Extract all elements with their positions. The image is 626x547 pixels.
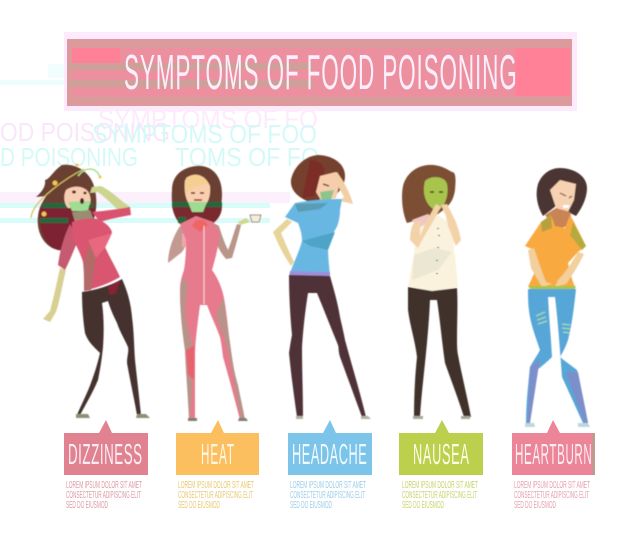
panel: headache: LOREM IPSUM DOLOR SIT AMET: [290, 480, 366, 491]
neck: [72, 210, 94, 226]
compression artefact ghost text: SYMPTOMS OF FOO: [92, 119, 317, 149]
compression artefact ghost text: D POISONING: [0, 142, 138, 172]
shoes: [525, 423, 535, 427]
compression artefact strips: [0, 192, 290, 223]
panel: dizziness: CONSECTETUR ADIPISCING ELIT: [66, 490, 141, 501]
jeans: [526, 289, 588, 423]
left arm: [273, 219, 294, 266]
description: SED DO EIUSMOD: [514, 500, 556, 511]
neck: [308, 203, 328, 210]
arms covering mouth: [410, 204, 441, 248]
panel: nausea: LOREM IPSUM DOLOR SIT AMET: [402, 480, 478, 491]
label box: [64, 420, 148, 475]
title text: SYMPTOMS OF FOOD POISONING: [124, 45, 517, 101]
label box: [288, 420, 372, 475]
face: [316, 172, 340, 202]
hair: [537, 168, 587, 216]
hair: [172, 166, 222, 224]
figure: heartburn woman: [525, 168, 590, 427]
description: SED DO EIUSMOD: [290, 500, 332, 511]
compression artefact ghost text: TOMS OF FO: [175, 142, 319, 172]
jeans rips: [536, 312, 570, 333]
panel: heartburn: [512, 420, 595, 511]
description: SED DO EIUSMOD: [402, 500, 444, 511]
compression artefact ghost text: OD POISONING: [0, 117, 170, 147]
face: [185, 177, 210, 210]
waistband: [528, 286, 576, 291]
panel: headache: CONSECTETUR ADIPISCING ELIT: [290, 490, 365, 501]
description: [178, 480, 254, 511]
panel: dizziness: [64, 420, 148, 511]
hair: [402, 165, 456, 223]
left arm: [168, 226, 192, 263]
figure: nausea woman: [402, 165, 471, 419]
title banner: [64, 32, 577, 111]
shoes: [296, 416, 303, 419]
label: HEAT: [201, 438, 234, 471]
arms on stomach: [528, 248, 552, 287]
trousers: [408, 287, 471, 417]
raised arm: [90, 186, 130, 214]
label: HEARTBURN: [515, 438, 592, 471]
panel: headache: [288, 420, 372, 511]
panel: nausea: [399, 420, 483, 511]
label: DIZZINESS: [68, 438, 142, 470]
description: SED DO EIUSMOD: [66, 500, 108, 511]
label box: [512, 420, 595, 475]
panel: dizziness: LOREM IPSUM DOLOR SIT AMET: [66, 480, 142, 491]
description: [290, 480, 366, 511]
trousers: [77, 279, 141, 415]
description: [402, 480, 478, 511]
collar: [412, 214, 434, 228]
neck: [545, 208, 573, 230]
description: [66, 480, 142, 511]
description: [514, 480, 590, 511]
lowered arm: [43, 268, 66, 322]
panel: heat: LOREM IPSUM DOLOR SIT AMET: [178, 480, 254, 491]
compression artefact ghost text: SYMPTOMS OF FO: [98, 104, 318, 134]
shirt: [72, 218, 120, 291]
buttons: [437, 228, 439, 274]
label box: [399, 420, 483, 475]
label: HEADACHE: [292, 438, 367, 470]
shirt: [525, 215, 586, 287]
green face: [424, 177, 448, 211]
raised arm: [333, 172, 353, 204]
description: SED DO EIUSMOD: [178, 500, 220, 511]
label: NAUSEA: [413, 438, 469, 470]
trousers: [289, 275, 366, 417]
shoes: [76, 414, 90, 418]
figure: dizziness woman: [31, 164, 150, 418]
hair: [36, 165, 96, 250]
label box: [176, 420, 259, 475]
face: [64, 187, 91, 208]
hair: [291, 155, 345, 202]
shoes: [188, 418, 197, 421]
dizzy ring and stars: [31, 169, 84, 218]
figure: headache woman: [273, 155, 371, 419]
shirt: [285, 199, 342, 275]
pajama suit: [180, 216, 245, 420]
right arm and cup: [212, 222, 241, 259]
shirt: [408, 214, 458, 292]
panel: heat: [176, 420, 259, 511]
figure: heat woman: [168, 166, 261, 421]
shoes: [413, 416, 423, 419]
panel: heat: CONSECTETUR ADIPISCING ELIT: [178, 490, 253, 501]
panel: nausea: CONSECTETUR ADIPISCING ELIT: [402, 490, 477, 501]
compression artefact ghost text: [0, 64, 319, 172]
face: [550, 180, 576, 212]
